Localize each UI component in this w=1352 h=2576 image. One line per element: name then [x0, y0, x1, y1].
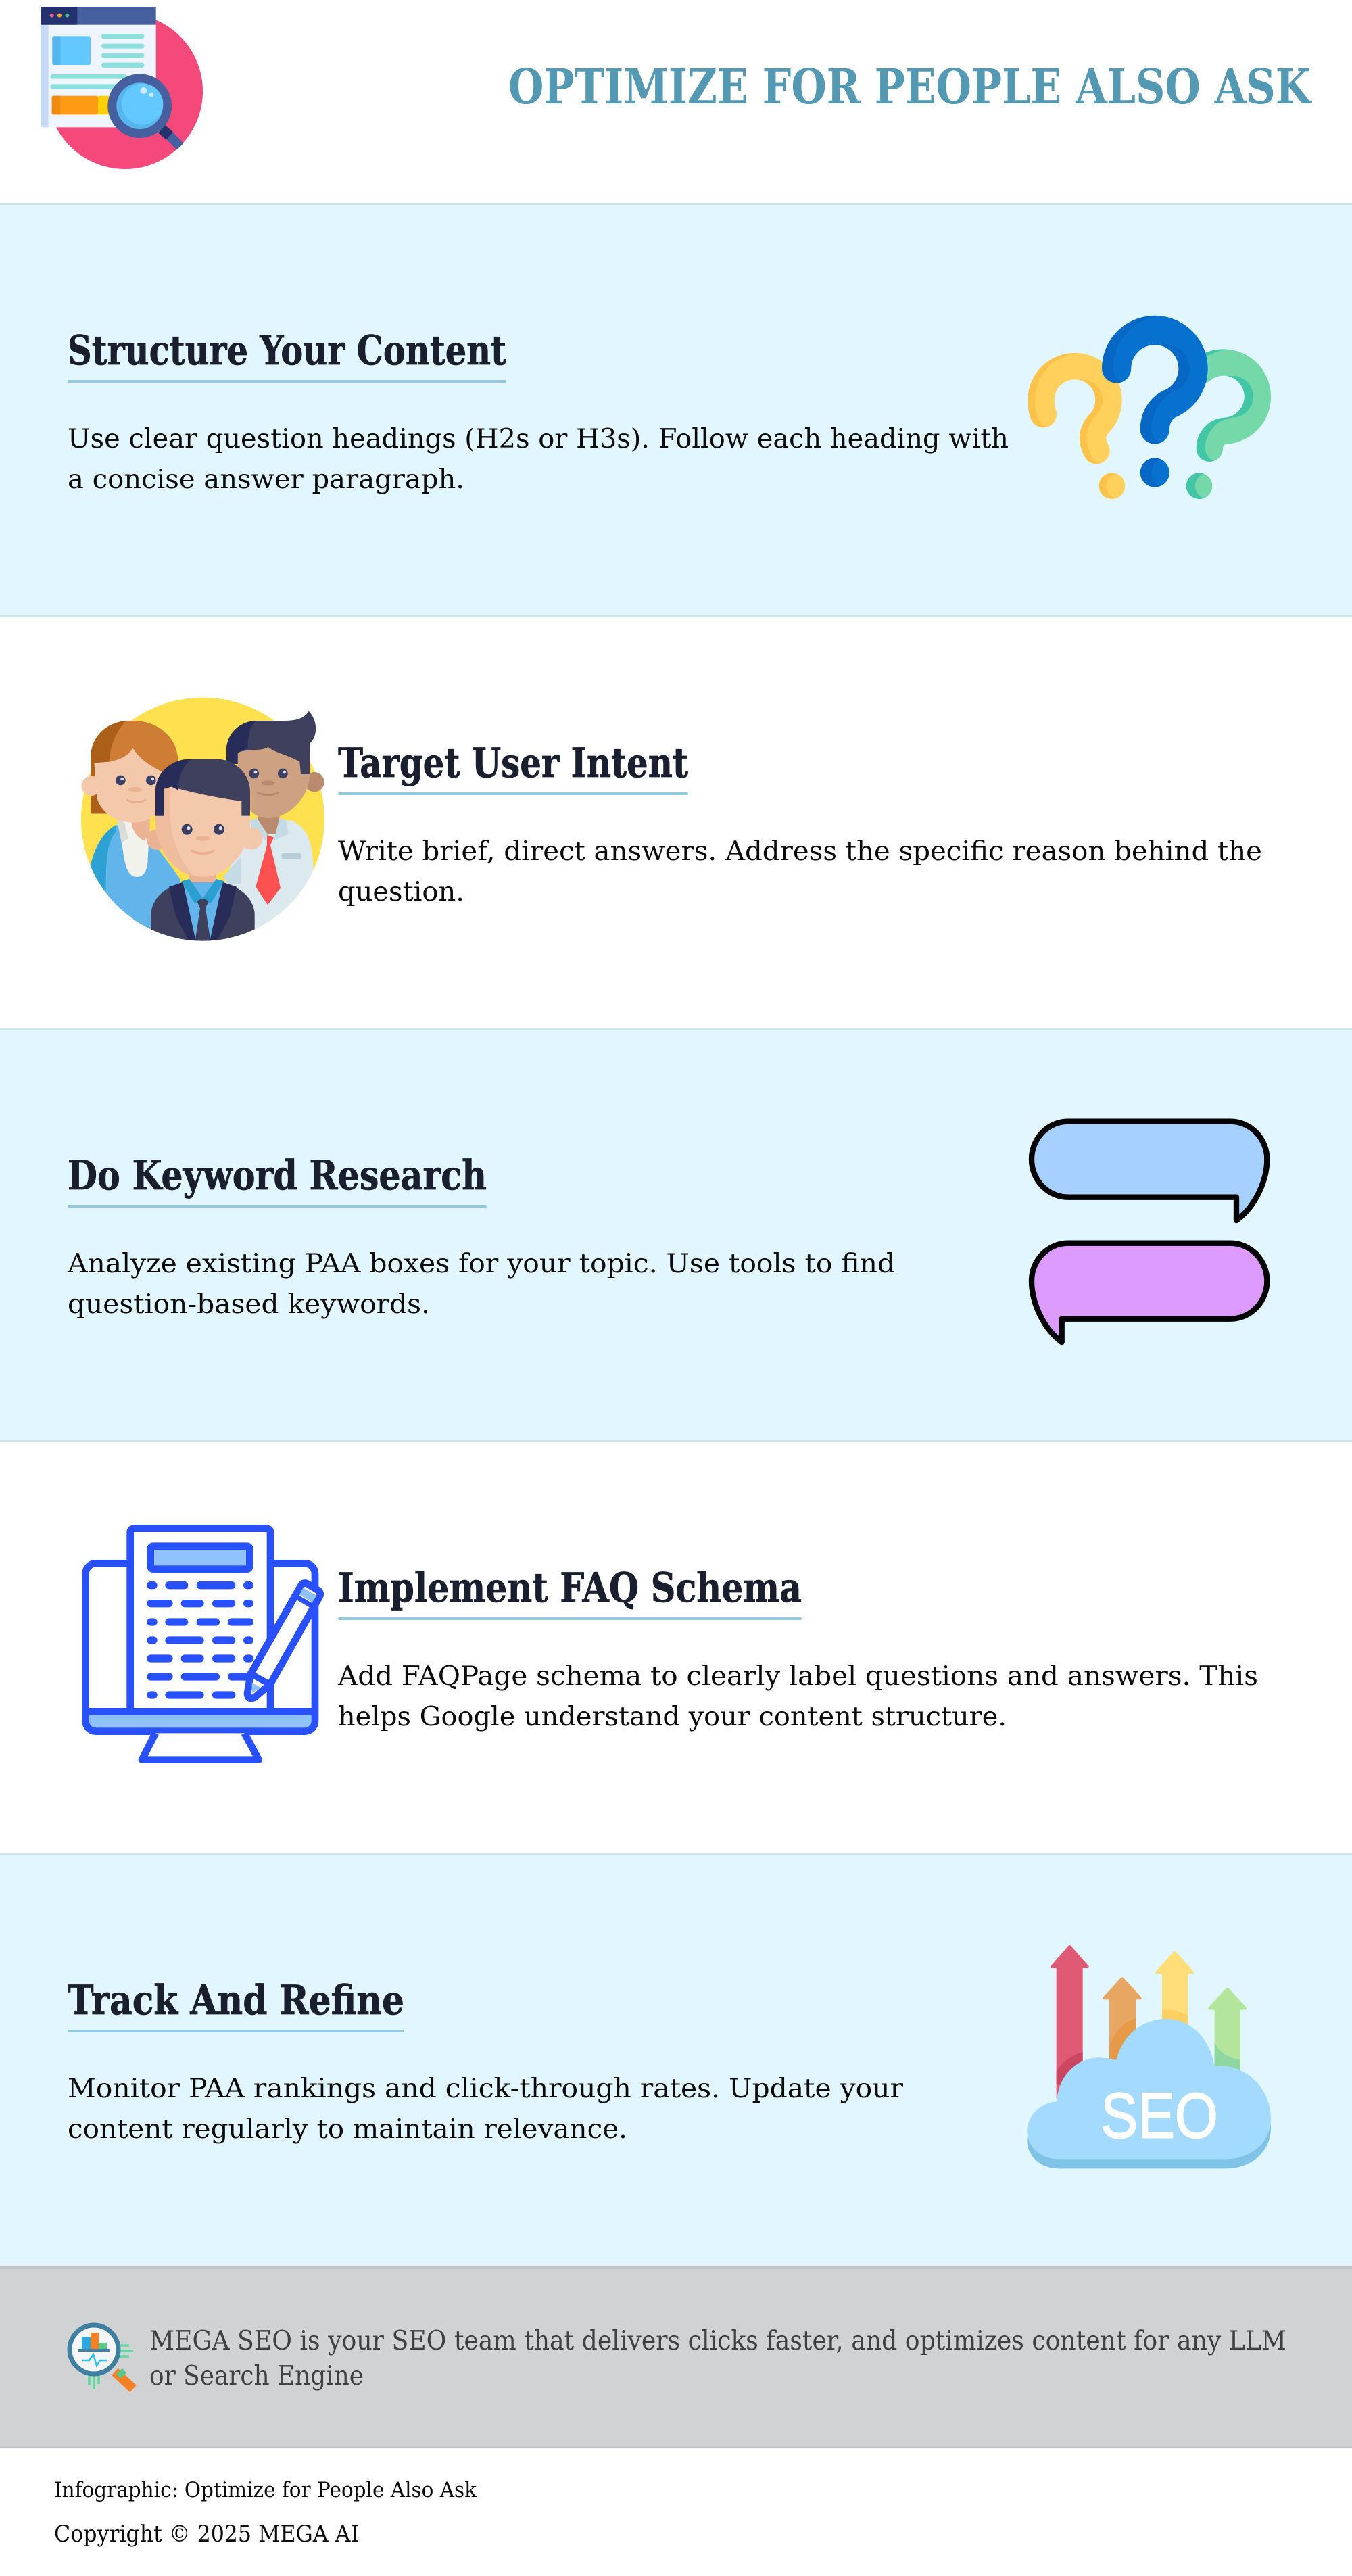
heading underline — [68, 2030, 404, 2032]
panel: target user intent — [0, 615, 1352, 941]
heading underline — [338, 1617, 802, 1620]
copyright: Copyright © 2025 MEGA AI — [54, 2521, 359, 2548]
body text: a concise answer paragraph. — [68, 464, 464, 495]
panel background — [0, 1028, 1352, 1441]
body text — [337, 1661, 1258, 1732]
body text: question-based keywords. — [68, 1289, 430, 1320]
icon: web page with magnifier — [41, 7, 203, 169]
icon: question marks — [1028, 315, 1271, 499]
panel: do keyword research — [0, 1028, 1352, 1441]
panel background — [0, 1853, 1352, 2267]
icon: SEO cloud with arrows: SEO — [1101, 2080, 1218, 2152]
icon: magnifier with chart — [70, 2325, 133, 2389]
heading underline — [68, 380, 506, 383]
body text: Monitor PAA rankings and click-through rates. Update your — [68, 2074, 903, 2104]
icon: monitor with document and pencil — [86, 1529, 320, 1760]
body text — [68, 2074, 903, 2145]
footer caption: Infographic: Optimize for People Also Ask — [54, 2478, 477, 2502]
body text: helps Google understand your content structure. — [338, 1702, 1007, 1732]
promo band — [0, 2266, 1352, 2448]
body text — [68, 424, 1009, 495]
heading: Do Keyword Research — [68, 1152, 487, 1199]
promo text: MEGA SEO is your SEO team that delivers clicks faster, and optimizes content for any LLM — [149, 2326, 1286, 2356]
promo text — [149, 2326, 1286, 2391]
body text: question. — [338, 877, 464, 907]
heading underline — [338, 792, 688, 795]
heading: Implement FAQ Schema — [338, 1565, 802, 1612]
body text: content regularly to maintain relevance. — [68, 2114, 627, 2145]
heading: Structure Your Content — [68, 327, 506, 375]
body text: Add FAQPage schema to clearly label questions and answers. This — [337, 1661, 1258, 1692]
panel: track and refine — [0, 1853, 1352, 2267]
body text: Use clear question headings (H2s or H3s). Follow each heading with — [68, 424, 1009, 454]
heading underline — [68, 1205, 487, 1208]
header — [0, 0, 1352, 204]
footer — [54, 2478, 477, 2548]
icon: SEO cloud with arrows — [1027, 1945, 1271, 2168]
body text — [338, 836, 1262, 907]
icon: speech bubbles — [1032, 1122, 1267, 1342]
icon: three people — [81, 698, 324, 942]
panel: structure your content — [0, 203, 1352, 617]
body text: Analyze existing PAA boxes for your topic. Use tools to find — [67, 1249, 895, 1279]
panel background — [0, 617, 1352, 1028]
heading: Target User Intent — [338, 740, 688, 787]
heading: Track And Refine — [68, 1977, 404, 2024]
panel background — [0, 204, 1352, 617]
header background — [0, 0, 1352, 204]
band background — [0, 2267, 1352, 2448]
promo text: or Search Engine — [149, 2361, 364, 2391]
panel background — [0, 1441, 1352, 1853]
body text: Write brief, direct answers. Address the specific reason behind the — [338, 836, 1262, 867]
body text — [67, 1249, 895, 1320]
panel: implement faq schema — [0, 1440, 1352, 1853]
